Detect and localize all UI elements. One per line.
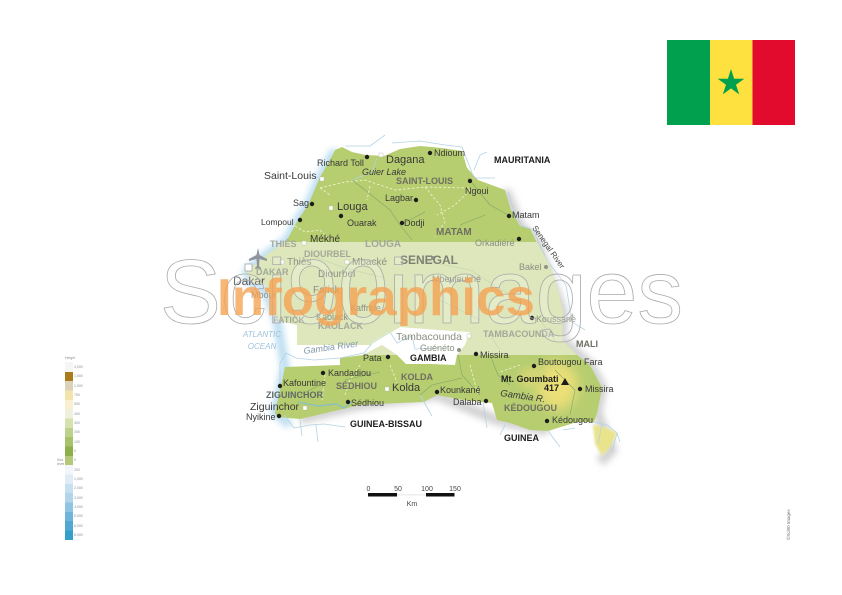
- place labels: Richard Toll: [317, 158, 364, 168]
- rivers: [280, 135, 620, 452]
- elevation legend: 1,500: [74, 374, 83, 378]
- flag of Senegal: [667, 40, 795, 125]
- elevation legend: 8,000: [74, 533, 83, 537]
- place labels: Lompoul: [261, 217, 294, 227]
- image credit: ©Sci90 Images: [785, 509, 791, 540]
- elevation legend: 1,000: [74, 477, 83, 481]
- faded streams: [300, 255, 555, 350]
- place labels: Guénéto: [420, 343, 455, 353]
- place labels: Guier Lake: [362, 167, 406, 177]
- place labels: KAOLACK: [318, 321, 363, 331]
- place labels: Missira: [585, 384, 614, 394]
- place labels: KÉDOUGOU: [504, 403, 557, 413]
- elevation legend: 0: [74, 458, 76, 462]
- place labels: Kaffrine: [350, 303, 381, 313]
- place labels: SAINT-LOUIS: [396, 176, 453, 186]
- scale bar: [367, 486, 461, 508]
- place labels: Mbacké: [352, 257, 387, 268]
- place labels: Dodji: [404, 218, 425, 228]
- highland colouring: [518, 362, 578, 410]
- elevation legend: 200: [74, 468, 80, 472]
- elevation legend: 3,000: [74, 496, 83, 500]
- faded band over the land: [230, 242, 580, 355]
- coastal glow: [247, 150, 335, 425]
- place labels: MALI: [576, 339, 598, 349]
- place labels: Saint-Louis: [264, 170, 317, 182]
- place labels: Fatick: [313, 285, 341, 296]
- settlement markers: [245, 151, 582, 423]
- place labels: Nyikine: [246, 412, 276, 422]
- place labels: Kédougou: [552, 415, 593, 425]
- elevation legend: 6,000: [74, 524, 83, 528]
- Casamance river: [298, 402, 352, 408]
- scale bar: 0: [367, 486, 371, 493]
- place labels: TAMBACOUNDA: [483, 329, 555, 339]
- place labels: DIOURBEL: [304, 249, 352, 259]
- place labels: DAKAR: [256, 267, 289, 277]
- place labels: Sag: [293, 198, 309, 208]
- place labels: Koussané: [536, 314, 576, 324]
- land shadow: [300, 190, 612, 462]
- elevation legend: level: [57, 462, 64, 466]
- place labels: Kounkané: [440, 385, 481, 395]
- elevation legend: 2,000: [74, 486, 83, 490]
- place labels: Sédhiou: [351, 398, 384, 408]
- scale bar: 50: [394, 486, 402, 493]
- water labels: [242, 224, 567, 405]
- southeast yellow lobe: [593, 425, 617, 456]
- regional borders: [295, 180, 520, 400]
- place labels: 417: [544, 383, 559, 393]
- streams: [300, 178, 575, 415]
- water labels: ATLANTIC: [242, 330, 281, 339]
- place labels: Kolda: [392, 382, 421, 394]
- elevation legend: 300: [74, 421, 80, 425]
- place labels: Orkadiéré: [475, 238, 515, 248]
- scale bar: 100: [421, 486, 433, 493]
- elevation legend: 500: [74, 402, 80, 406]
- icon: summit triangle: [561, 378, 569, 385]
- elevation legend: 3,000: [74, 365, 83, 369]
- place labels: Mbour: [251, 290, 277, 300]
- place labels: Mékhé: [310, 234, 340, 245]
- place labels: Pata: [363, 353, 382, 363]
- place labels: Boutougou Fara: [538, 357, 603, 367]
- place labels: SÉDHIOU: [336, 381, 377, 391]
- elevation legend: 0: [74, 449, 76, 453]
- place labels: Ziguinchor: [250, 401, 300, 413]
- place labels: THIÈS: [270, 239, 297, 249]
- water labels: Senegal River: [530, 224, 567, 271]
- place labels: MATAM: [436, 227, 472, 238]
- elevation legend: 200: [74, 430, 80, 434]
- place labels: MAURITANIA: [494, 155, 551, 165]
- place labels: GUINEA-BISSAU: [350, 419, 422, 429]
- place labels: Mbeuleukhé: [432, 274, 481, 284]
- place labels: Dakar: [233, 274, 265, 288]
- place labels: Ngoui: [465, 186, 489, 196]
- place labels: KOLDA: [401, 372, 433, 382]
- water labels: Gambia R.: [500, 388, 546, 405]
- place labels: Bakel: [519, 262, 542, 272]
- place labels: Mt. Goumbati: [501, 374, 558, 384]
- elevation legend: Height: [65, 356, 75, 360]
- place labels: LOUGA: [365, 239, 401, 250]
- place labels: Ndioum: [434, 148, 465, 158]
- place labels: Thiès: [287, 257, 311, 268]
- place labels: Kandadiou: [328, 368, 371, 378]
- place labels: [233, 148, 614, 443]
- place labels: Ouarak: [347, 218, 377, 228]
- place labels: Tambacounda: [396, 331, 462, 343]
- icon: airplane: [249, 248, 267, 269]
- land area: [247, 146, 602, 431]
- place labels: Dagana: [386, 154, 425, 166]
- place labels: FATICK: [273, 315, 305, 325]
- place labels: Dalaba: [453, 397, 482, 407]
- place labels: Matam: [512, 210, 540, 220]
- elevation legend: 1,000: [74, 384, 83, 388]
- place labels: Kafountine: [283, 378, 326, 388]
- place labels: Missira: [480, 350, 508, 360]
- elevation legend: 400: [74, 412, 80, 416]
- elevation legend: 4,000: [74, 505, 83, 509]
- elevation legend: [57, 356, 83, 540]
- place labels: SENEGAL: [400, 253, 458, 267]
- elevation legend: 750: [74, 393, 80, 397]
- watermark: orange wordmark: Infographics: [217, 269, 535, 327]
- water labels: OCEAN: [248, 342, 276, 351]
- place labels: Diourbel: [318, 269, 355, 280]
- water labels: Gambia River: [303, 338, 360, 356]
- place labels: GUINEA: [504, 433, 540, 443]
- watermark: outlined wordmark: Sci90images: [160, 242, 683, 343]
- elevation legend: 100: [74, 440, 80, 444]
- elevation legend: 5,000: [74, 514, 83, 518]
- place labels: GAMBIA: [410, 353, 447, 363]
- map of Senegal: [230, 135, 620, 462]
- scale bar: Km: [407, 501, 417, 508]
- place labels: Kaolack: [316, 312, 349, 322]
- place labels: ZIGUINCHOR: [266, 390, 323, 400]
- scale bar: 150: [449, 486, 461, 493]
- elevation legend: Sea: [57, 458, 63, 462]
- place labels: Lagbar: [385, 193, 413, 203]
- place labels: Louga: [337, 201, 368, 213]
